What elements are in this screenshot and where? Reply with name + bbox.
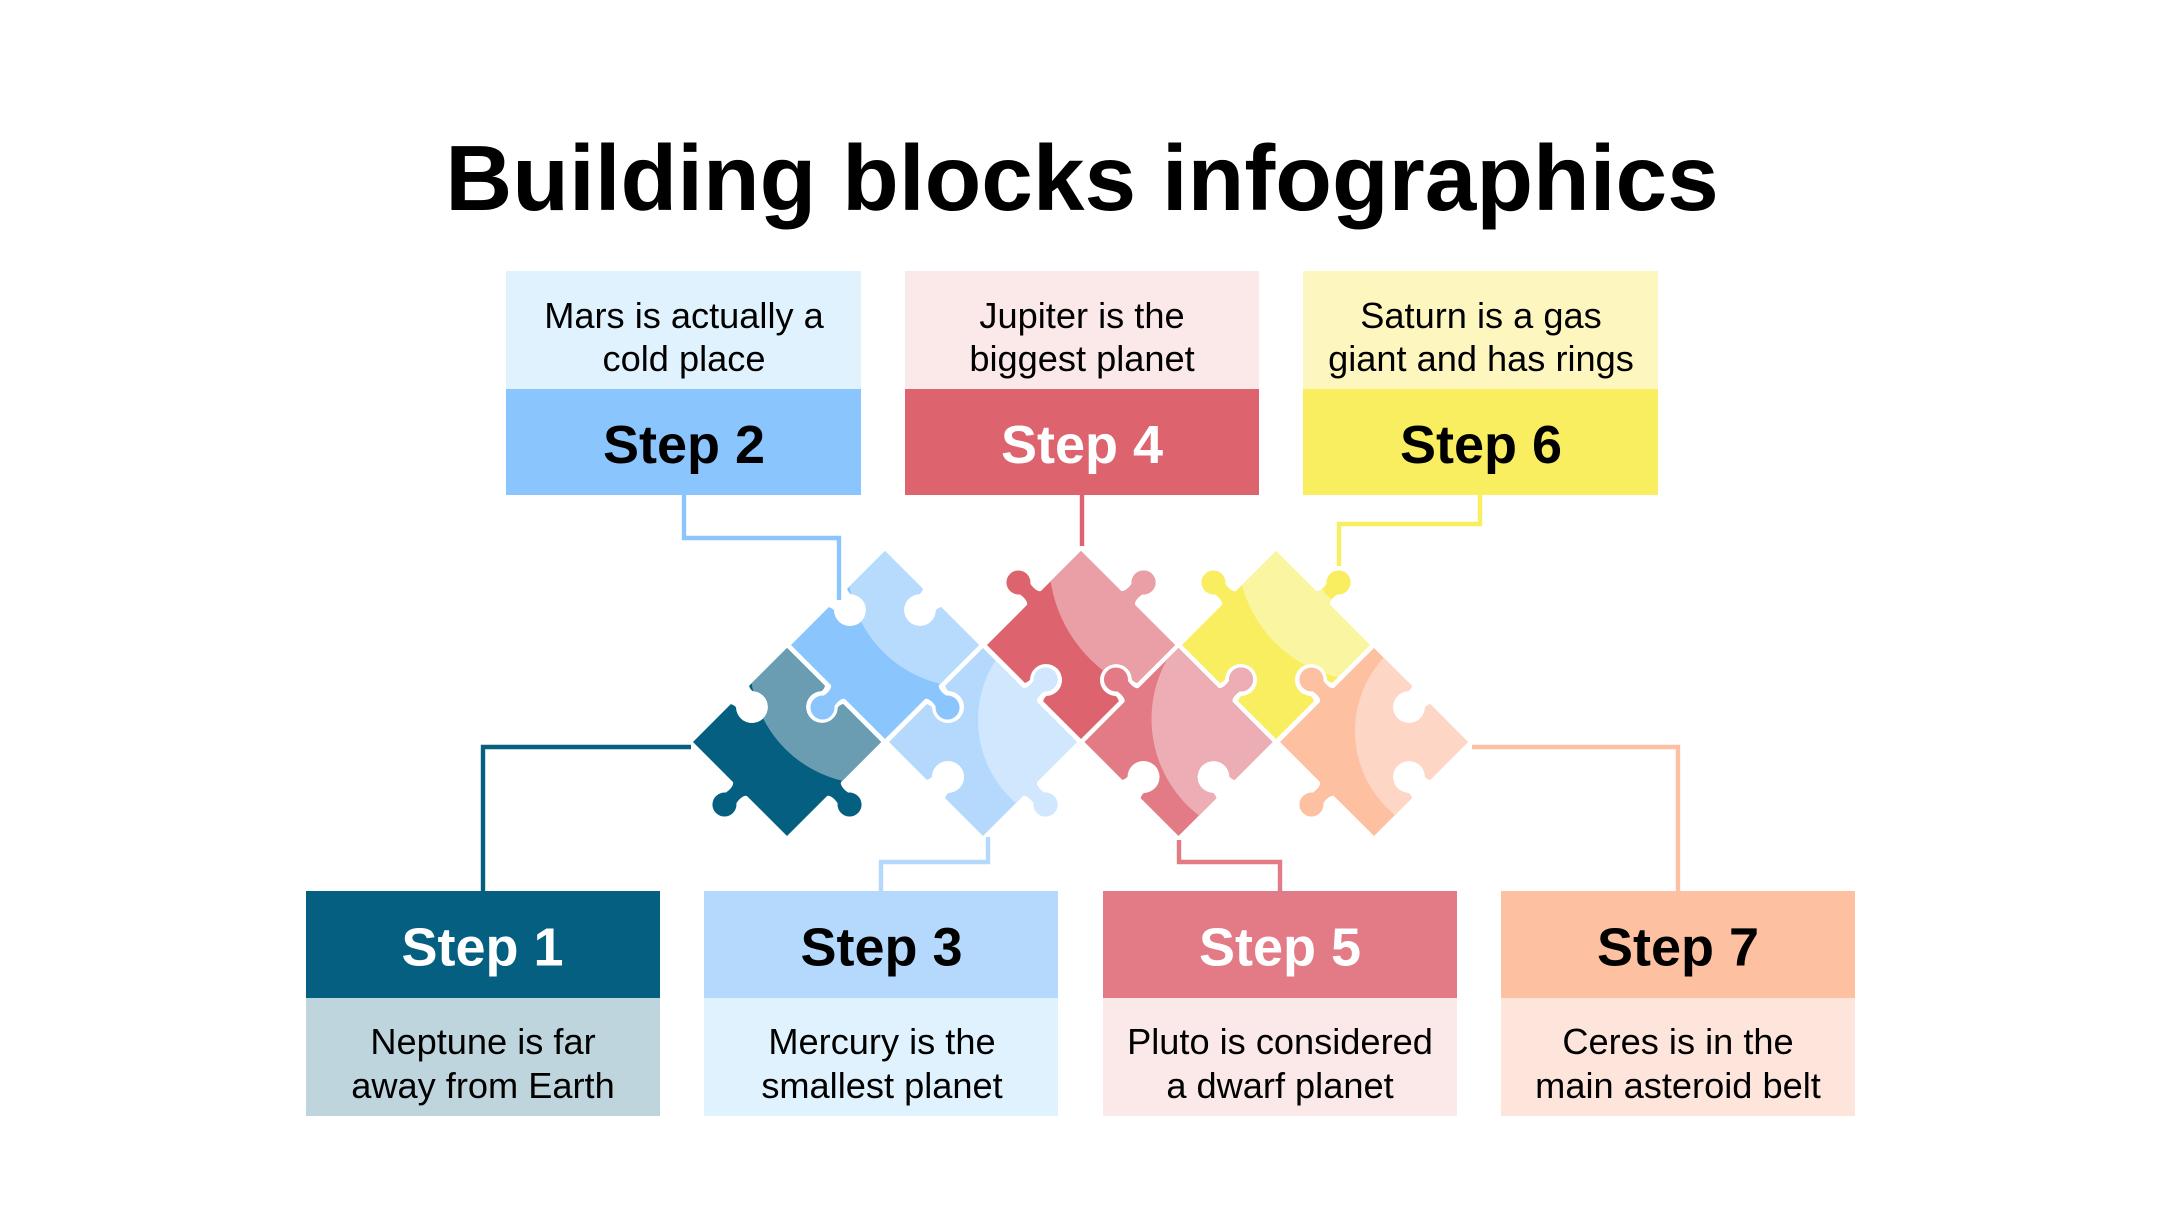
panel: step 5 [1103,891,1457,1116]
puzzle piece 4 [987,551,1175,739]
panel: step 4: biggest planet [969,338,1195,379]
panel: step 7: Step 7 [1597,918,1759,978]
panel: step 7: main asteroid belt [1535,1065,1821,1106]
puzzle piece 5 [1084,648,1272,836]
connector: step 6 [1339,495,1480,566]
panel: step 1: away from Earth [351,1065,615,1106]
panel: step 3 [704,891,1058,1116]
panel: step 3: smallest planet [761,1065,1003,1106]
panel: step 7 [1501,891,1855,1116]
panel: step 6: Saturn is a gas [1360,295,1602,336]
panel: step 7: Ceres is in the [1562,1021,1794,1062]
puzzle piece 1 [693,648,881,836]
panel: step 3: Step 3 [800,918,963,978]
panel: step 1 [306,891,660,1116]
panel: step 6 [1303,271,1658,495]
puzzle piece 6 [1182,551,1370,739]
connector: step 3 [881,837,988,891]
puzzle piece 7 [1280,648,1468,836]
connector: step 2 [684,495,839,600]
puzzle piece 2 [791,551,979,739]
panel: step 2: cold place [603,338,765,379]
panel: step 4 [905,271,1259,495]
panel: step 2: Mars is actually a [544,295,825,336]
panel: step 4: Step 4 [1001,415,1163,475]
connector: step 1 [483,747,691,891]
connector: step 4 [1080,495,1084,546]
puzzle piece 3 [889,648,1077,836]
panel: step 6: giant and has rings [1328,338,1634,379]
panel: step 6: Step 6 [1400,415,1562,475]
panel: step 5: Pluto is considered [1127,1021,1433,1062]
panel: step 4: Jupiter is the [979,295,1185,336]
puzzle [693,551,1468,836]
panel: step 1: Neptune is far [370,1021,596,1062]
panel: step 2 [506,271,861,495]
panel: step 3: Mercury is the [768,1021,996,1062]
panel: step 1: Step 1 [401,918,564,978]
connector: step 5 [1179,840,1280,891]
panel: step 5: a dwarf planet [1166,1065,1394,1106]
title: Building blocks infographics [445,126,1719,230]
panel: step 5: Step 5 [1199,918,1361,978]
connector: step 7 [1472,747,1678,891]
panel: step 2: Step 2 [603,415,765,475]
